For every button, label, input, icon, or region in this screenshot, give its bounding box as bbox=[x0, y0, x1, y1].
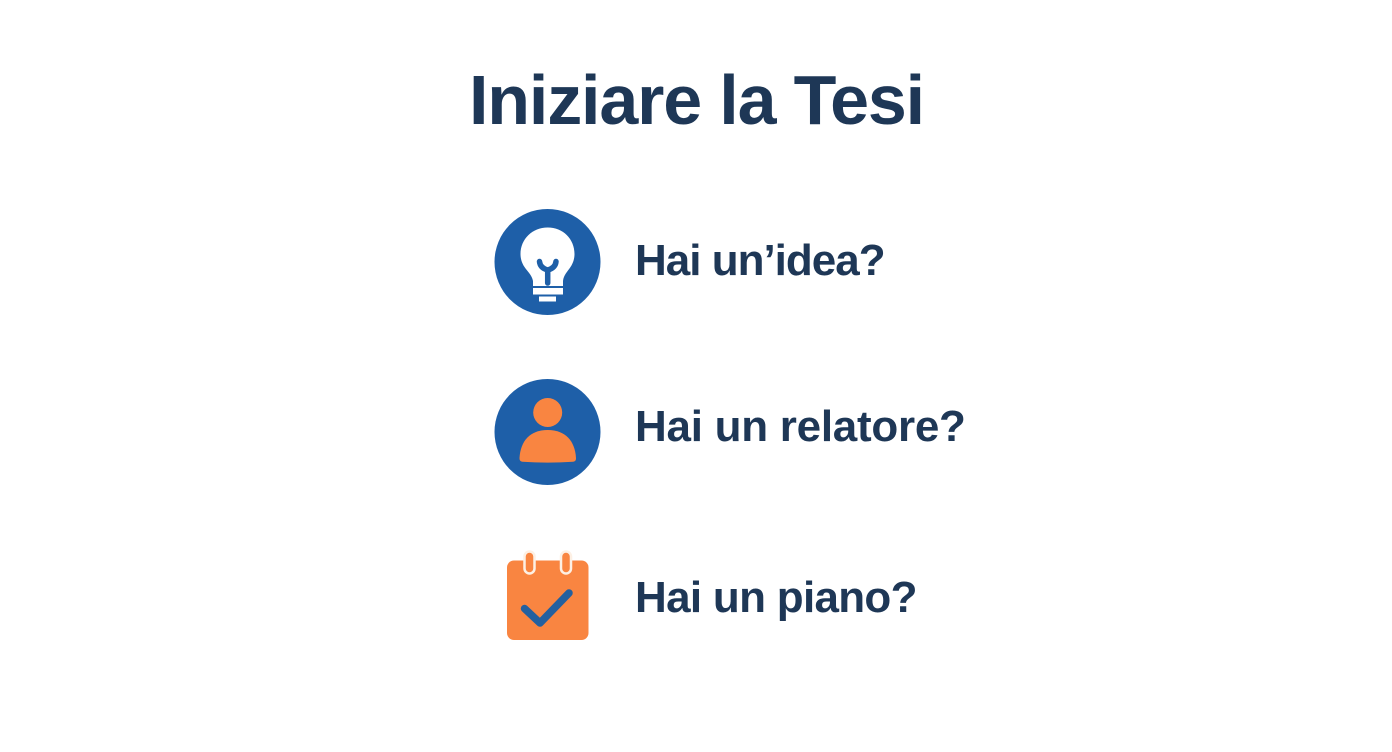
question: plan: Hai un piano? bbox=[635, 573, 917, 622]
question: supervisor: Hai un relatore? bbox=[635, 402, 966, 451]
title: Iniziare la Tesi bbox=[469, 61, 924, 139]
question: idea: Hai un’idea? bbox=[635, 236, 885, 285]
